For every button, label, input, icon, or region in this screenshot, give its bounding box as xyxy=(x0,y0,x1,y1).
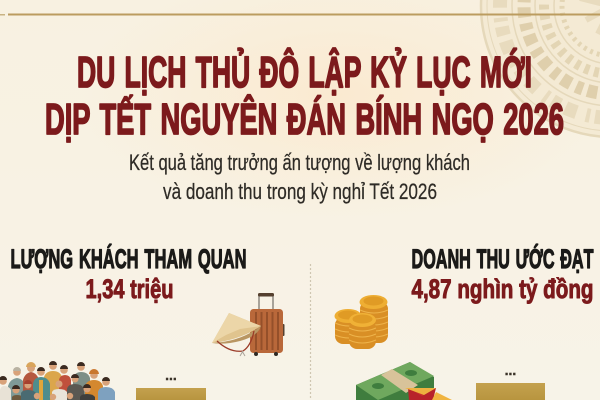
subtitle xyxy=(129,150,470,204)
bronze drum watermark xyxy=(481,0,600,137)
bar: revenue xyxy=(476,362,545,400)
bar: visitors xyxy=(136,367,206,400)
icon: suitcase and conical hat xyxy=(212,293,284,356)
panel: visitors xyxy=(0,243,284,400)
heading: visitors: LƯỢNG KHÁCH THAM QUAN xyxy=(10,243,246,274)
bar: revenue: ... xyxy=(505,362,516,378)
icon: coin stacks xyxy=(334,295,388,349)
panel: revenue xyxy=(334,243,594,400)
subtitle: Kết quả tăng trưởng ấn tượng về lượng khách xyxy=(129,150,470,175)
title xyxy=(45,46,564,144)
icon: cash bundle and red envelope xyxy=(356,362,452,400)
value: visitors: 1,34 triệu xyxy=(86,274,174,304)
subtitle: và doanh thu trong kỳ nghỉ Tết 2026 xyxy=(163,179,437,204)
divider xyxy=(310,264,312,400)
top rule xyxy=(0,14,600,16)
illustration: crowd of visitors xyxy=(0,361,115,400)
bar: visitors: ... xyxy=(165,367,177,383)
